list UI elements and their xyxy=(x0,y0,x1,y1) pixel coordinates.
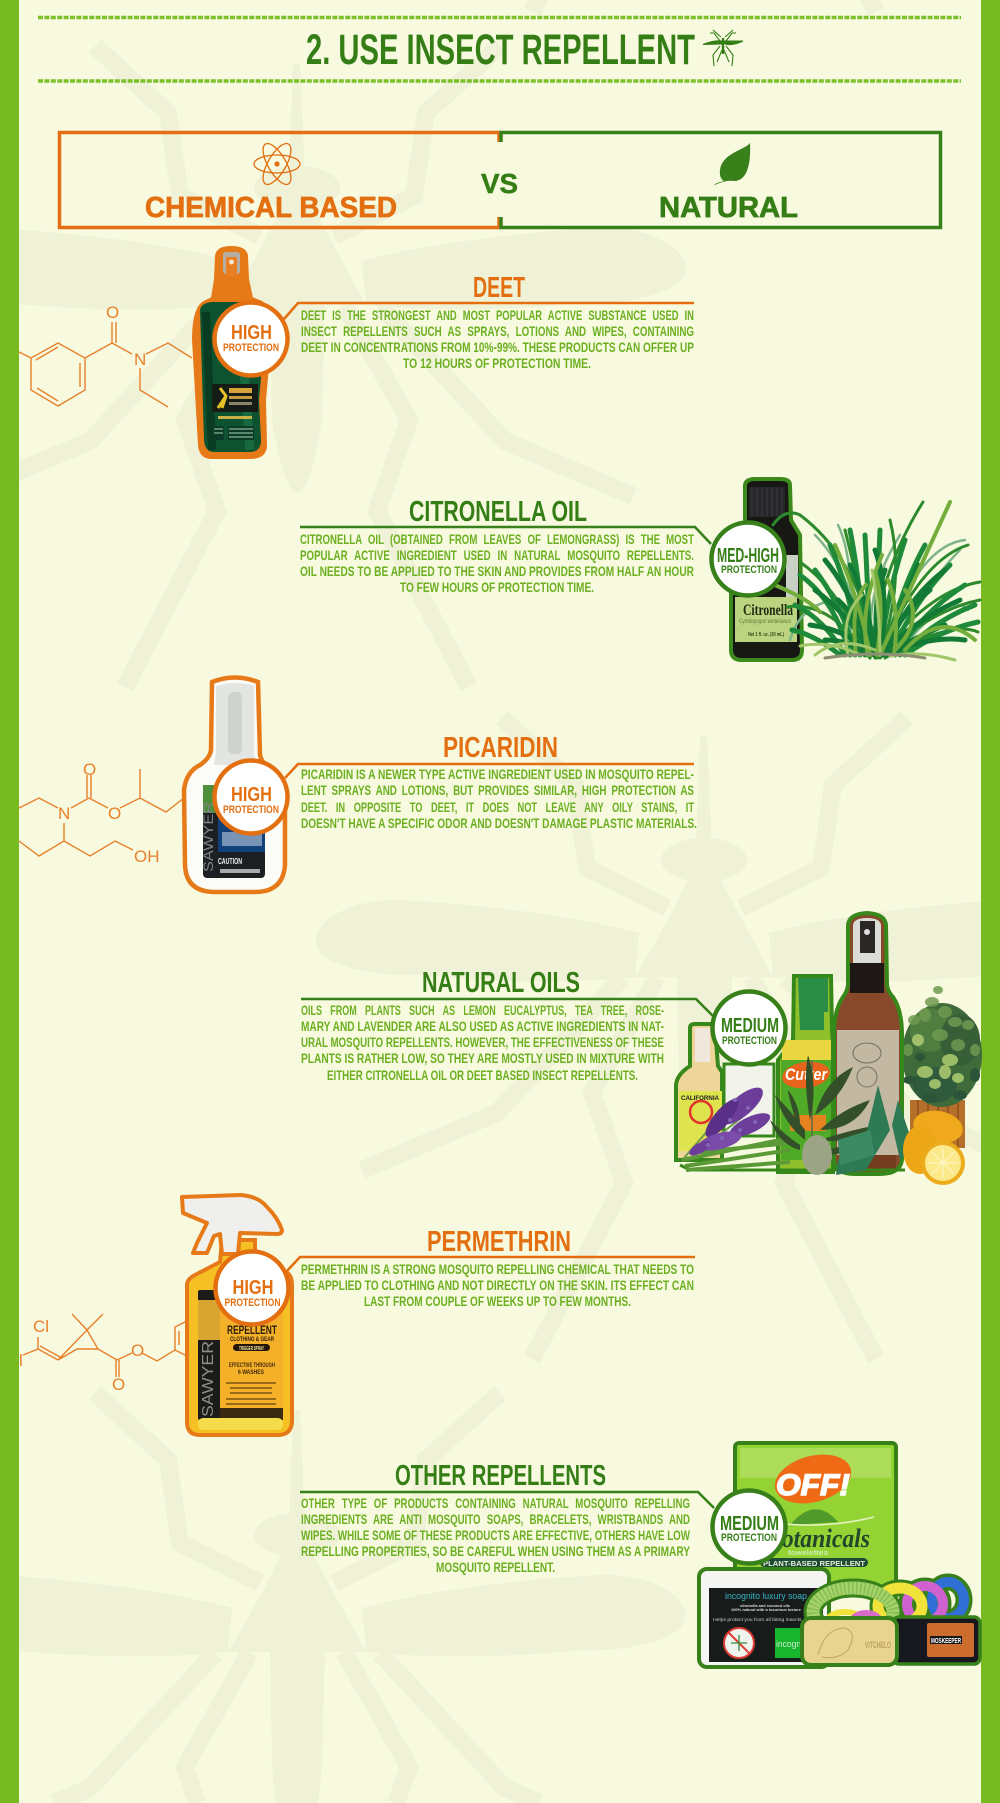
DEET spray bottle xyxy=(193,247,270,458)
badge: medium protection: MEDIUM xyxy=(721,1015,779,1037)
connector line xyxy=(285,764,694,778)
section: DEET xyxy=(19,247,694,458)
OFF towelettes box: PLANT-BASED REPELLENT xyxy=(763,1559,865,1568)
incognito soap: incognito luxury soap xyxy=(725,1591,807,1601)
badge: med-high protection xyxy=(712,522,784,596)
heading: DEET xyxy=(473,272,525,304)
description: DEET. IN OPPOSITE TO DEET, IT DOES NOT LEAVE ANY OILY STAINS, IT xyxy=(301,799,694,815)
badge: high protection: PROTECTION xyxy=(223,804,279,816)
description: MARY AND LAVENDER ARE ALSO USED AS ACTIVE INGREDIENTS IN NAT- xyxy=(301,1018,664,1034)
description: LENT SPRAYS AND LOTIONS, BUT PROVIDES SIMILAR, HIGH PROTECTION AS xyxy=(301,782,694,798)
panel: chemical based xyxy=(60,132,499,228)
picaridin bottle xyxy=(184,678,285,892)
molecule: permethrin structure xyxy=(19,1314,187,1394)
description: OILS FROM PLANTS SUCH AS LEMON EUCALYPTUS, TEA TREE, ROSE- xyxy=(301,1002,664,1018)
description: EITHER CITRONELLA OIL OR DEET BASED INSECT REPELLENTS. xyxy=(327,1067,638,1083)
description: PERMETHRIN IS A STRONG MOSQUITO REPELLING CHEMICAL THAT NEEDS TO xyxy=(301,1261,694,1277)
section: other repellents xyxy=(300,1443,980,1667)
small sun-label bottle: CALIFORNIA xyxy=(681,1096,720,1102)
white jar xyxy=(724,1064,774,1136)
badge: high protection: PROTECTION xyxy=(224,1297,281,1309)
badge: high protection: HIGH xyxy=(232,1277,274,1299)
description xyxy=(301,766,697,831)
illustration: lemongrass xyxy=(773,502,980,660)
badge: med-high protection: PROTECTION xyxy=(721,564,777,576)
mosquito bracelets xyxy=(813,1582,964,1636)
description: DOESN'T HAVE A SPECIFIC ODOR AND DOESN'T DAMAGE PLASTIC MATERIALS. xyxy=(301,815,697,831)
badge: high protection: PROTECTION xyxy=(223,342,279,354)
section: picaridin xyxy=(19,678,697,892)
description xyxy=(301,307,694,371)
yellow kids band: VITCHELO xyxy=(865,1640,891,1650)
heading: NATURAL OILS xyxy=(422,967,580,999)
citronella bottle: Citronella xyxy=(743,602,793,619)
permethrin trigger spray bottle: REPELLENT xyxy=(227,1323,277,1337)
permethrin trigger spray bottle: CLOTHING & GEAR xyxy=(230,1337,275,1343)
permethrin trigger spray bottle: TRIGGER SPRAY xyxy=(239,1346,264,1352)
comparison header: chemical vs natural xyxy=(60,132,940,228)
connector line xyxy=(300,1492,714,1508)
badge: high protection xyxy=(216,1252,288,1324)
molecule: permethrin structure: O xyxy=(112,1375,125,1394)
product cluster: natural oil repellents and plants xyxy=(676,913,982,1185)
OFF towelettes box: OFF! xyxy=(776,1469,850,1502)
tea tree branch xyxy=(770,1055,878,1175)
molecule: picaridin structure: N xyxy=(58,804,70,823)
incognito soap: incogni xyxy=(776,1639,803,1649)
badge: high protection: HIGH xyxy=(231,322,272,344)
small sun-label bottle xyxy=(676,1024,722,1160)
potted plant xyxy=(902,986,982,1148)
description xyxy=(301,1495,691,1575)
incognito soap xyxy=(699,1569,829,1667)
OFF towelettes box: botanicals xyxy=(770,1524,870,1553)
badge: high protection xyxy=(214,302,288,376)
molecule: permethrin structure: l xyxy=(19,1351,23,1370)
background mosquito silhouettes xyxy=(204,166,792,1652)
heading: PICARIDIN xyxy=(443,732,558,764)
badge: high protection xyxy=(214,760,288,834)
green outline base xyxy=(680,1165,905,1170)
yellow kids band xyxy=(802,1618,897,1665)
natural label: NATURAL xyxy=(659,192,798,224)
molecule: picaridin structure: O xyxy=(83,760,96,779)
description: URAL MOSQUITO REPELLENTS. HOWEVER, THE EFFECTIVENESS OF THESE xyxy=(301,1034,664,1050)
section: citronella oil xyxy=(300,479,980,660)
product cluster: towelettes, soap and bracelets xyxy=(699,1443,980,1667)
description xyxy=(301,1261,694,1309)
incognito soap: Helps protect you from all biting insects. xyxy=(713,1617,803,1622)
description: INGREDIENTS ARE ANTI MOSQUITO SOAPS, BRACELETS, WRISTBANDS AND xyxy=(301,1511,690,1527)
green cutter bottle xyxy=(778,976,833,1172)
icon: mosquito xyxy=(703,30,743,66)
connector line xyxy=(300,527,711,544)
description: DEET IS THE STRONGEST AND MOST POPULAR ACTIVE SUBSTANCE USED IN xyxy=(301,307,694,323)
molecule: picaridin structure: O xyxy=(108,804,121,823)
description: BE APPLIED TO CLOTHING AND NOT DIRECTLY ON THE SKIN. ITS EFFECT CAN xyxy=(301,1277,694,1293)
large brown spray bottle xyxy=(834,913,902,1174)
badge: medium protection: PROTECTION xyxy=(722,1035,777,1047)
permethrin trigger spray bottle: EFFECTIVE THROUGH xyxy=(229,1363,275,1369)
title text: 2. USE INSECT REPELLENT xyxy=(306,26,695,74)
molecule: DEET structure xyxy=(19,303,192,407)
black moskeeper band xyxy=(893,1617,980,1664)
description: MOSQUITO REPELLENT. xyxy=(436,1559,555,1575)
molecule: DEET structure: N xyxy=(134,350,146,369)
lavender sprig xyxy=(684,1082,773,1158)
green cutter bottle: Cutter xyxy=(785,1065,828,1084)
badge: medium protection xyxy=(712,1490,786,1564)
description: DEET IN CONCENTRATIONS FROM 10%-99%. THESE PRODUCTS CAN OFFER UP xyxy=(301,339,694,355)
connector line xyxy=(284,303,694,319)
molecule: DEET structure: O xyxy=(106,303,119,322)
description xyxy=(300,531,694,595)
chemical based label: CHEMICAL BASED xyxy=(145,192,397,224)
incognito soap: 100% natural with a luxurious texture xyxy=(731,1607,802,1612)
description: POPULAR ACTIVE INGREDIENT USED IN NATURAL MOSQUITO REPELLENTS. xyxy=(300,547,694,563)
badge: medium protection: PROTECTION xyxy=(721,1532,777,1544)
icon: leaf xyxy=(714,143,750,185)
description: TO FEW HOURS OF PROTECTION TIME. xyxy=(400,579,594,595)
description: TO 12 HOURS OF PROTECTION TIME. xyxy=(403,355,591,371)
OFF towelettes box: towelettes xyxy=(788,1550,828,1557)
lemongrass stalks xyxy=(682,1138,790,1170)
black moskeeper band: MOSKEEPER xyxy=(931,1638,961,1645)
citronella bottle xyxy=(731,479,802,660)
citronella bottle: Net 1 fl. oz. (30 mL) xyxy=(748,632,784,638)
description: PICARIDIN IS A NEWER TYPE ACTIVE INGREDIENT USED IN MOSQUITO REPEL- xyxy=(301,766,694,782)
description: INSECT REPELLENTS SUCH AS SPRAYS, LOTIONS AND WIPES, CONTAINING xyxy=(301,323,694,339)
permethrin trigger spray bottle xyxy=(182,1195,292,1435)
permethrin trigger spray bottle: SAWYER xyxy=(200,1341,217,1417)
icon: no-mosquito sign xyxy=(724,1628,754,1658)
connector line xyxy=(301,999,713,1016)
title block xyxy=(38,18,961,81)
description: CITRONELLA OIL (OBTAINED FROM LEAVES OF LEMONGRASS) IS THE MOST xyxy=(300,531,694,547)
citronella bottle: Cymbopogon winterianus xyxy=(739,619,791,625)
description xyxy=(301,1002,664,1083)
description: REPELLING PROPERTIES, SO BE CAREFUL WHEN USING THEM AS A PRIMARY xyxy=(301,1543,690,1559)
description: OTHER TYPE OF PRODUCTS CONTAINING NATURAL MOSQUITO REPELLING xyxy=(301,1495,690,1511)
heading: OTHER REPELLENTS xyxy=(395,1460,606,1492)
molecule: permethrin structure: O xyxy=(131,1341,144,1360)
vs label: VS xyxy=(481,168,518,199)
molecule: picaridin structure: OH xyxy=(134,847,160,866)
badge: med-high protection: MED-HIGH xyxy=(717,545,779,567)
permethrin trigger spray bottle: 6 WASHES xyxy=(238,1370,264,1376)
OFF towelettes box xyxy=(735,1443,896,1588)
picaridin bottle: SAWYER xyxy=(200,802,216,872)
badge: medium protection xyxy=(712,992,786,1064)
badge: high protection: HIGH xyxy=(231,784,272,806)
description: LAST FROM COUPLE OF WEEKS UP TO FEW MONTHS. xyxy=(364,1293,631,1309)
heading: CITRONELLA OIL xyxy=(409,496,587,528)
cedar sprig xyxy=(836,1085,915,1175)
heading: PERMETHRIN xyxy=(427,1226,571,1258)
section: permethrin xyxy=(19,1195,695,1435)
section: natural oils xyxy=(301,913,982,1185)
lemons xyxy=(903,1107,965,1185)
panel: natural xyxy=(501,132,940,228)
icon: atom xyxy=(254,140,300,188)
incognito soap: citronella and coconut oils xyxy=(740,1603,791,1608)
description: WIPES. WHILE SOME OF THESE PRODUCTS ARE EFFECTIVE, OTHERS HAVE LOW xyxy=(301,1527,691,1543)
molecule: permethrin structure: Cl xyxy=(33,1317,49,1336)
badge: medium protection: MEDIUM xyxy=(720,1513,779,1535)
picaridin bottle: CAUTION xyxy=(218,857,242,866)
connector line xyxy=(286,1257,695,1272)
description: PLANTS IS RATHER LOW, SO THEY ARE MOSTLY USED IN MIXTURE WITH xyxy=(301,1050,664,1066)
description: OIL NEEDS TO BE APPLIED TO THE SKIN AND PROVIDES FROM HALF AN HOUR xyxy=(300,563,694,579)
molecule: picaridin structure xyxy=(19,760,184,866)
